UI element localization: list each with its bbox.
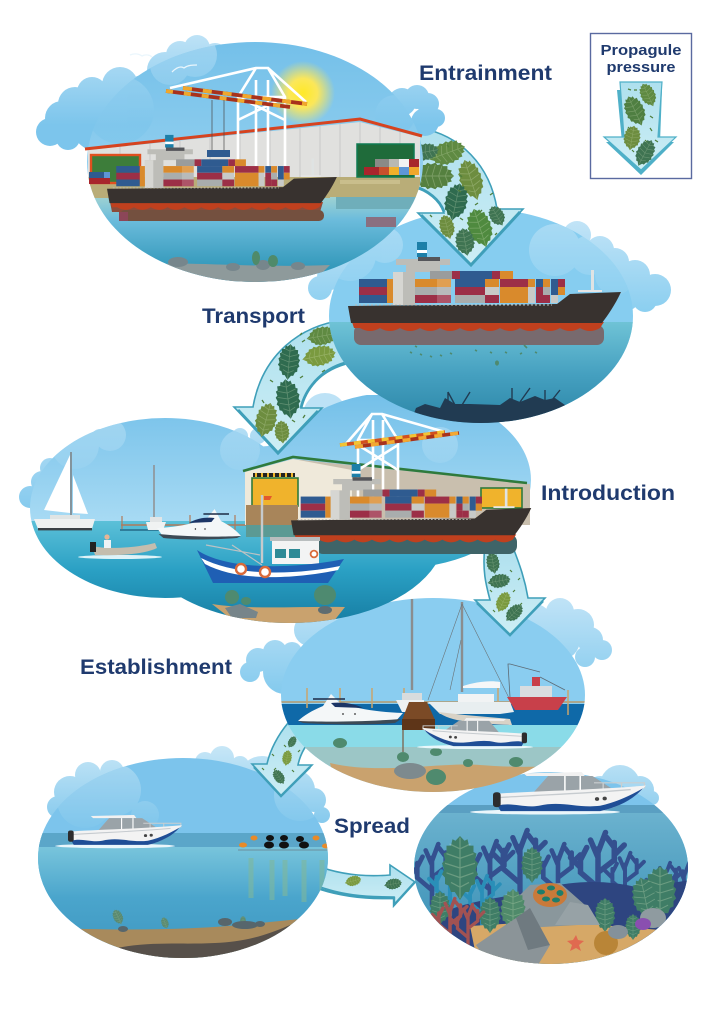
legend: propagule pressure bbox=[590, 34, 692, 178]
seagrass bbox=[225, 585, 336, 605]
legend arrow bbox=[604, 81, 676, 175]
clouds bbox=[240, 598, 612, 694]
arrow: establishment to spread bbox=[252, 723, 315, 796]
speedboat bbox=[417, 718, 533, 749]
scene: transport bbox=[308, 209, 671, 427]
container ship bbox=[348, 242, 621, 331]
clouds bbox=[36, 35, 445, 152]
legend: propagule pressure: Propagule bbox=[600, 43, 682, 59]
back rock bbox=[520, 883, 584, 928]
motor cruiser bbox=[157, 509, 241, 540]
arrow: introduction to establishment bbox=[475, 545, 545, 635]
crane bbox=[340, 414, 459, 497]
scene: entrainment bbox=[36, 33, 445, 287]
dark reef mass bbox=[425, 880, 690, 950]
yacht bbox=[428, 681, 514, 714]
red ship bbox=[507, 664, 567, 710]
quay bbox=[85, 177, 420, 198]
sailboat bbox=[34, 452, 95, 530]
seabed plants and rocks bbox=[112, 910, 246, 928]
jetty bbox=[120, 515, 246, 531]
reef contents bbox=[414, 805, 688, 964]
crane bbox=[166, 68, 307, 178]
speedboat bbox=[55, 815, 182, 848]
wooden jetty bbox=[402, 702, 435, 730]
seagrass bbox=[252, 251, 278, 267]
scene: spread, coral reef bbox=[414, 765, 688, 964]
label: Entrainment: Entrainment bbox=[419, 62, 552, 85]
re-drawn clouds over sky bbox=[58, 766, 314, 820]
longlines bbox=[251, 858, 322, 902]
rib dinghy with driver bbox=[78, 534, 162, 559]
dock rail bbox=[270, 701, 590, 703]
water and seabed bbox=[32, 521, 471, 623]
label: Transport: Transport bbox=[202, 305, 305, 328]
seagrass and rocks bbox=[333, 738, 523, 785]
sky bbox=[20, 395, 540, 525]
hull reflection bbox=[110, 202, 324, 221]
label: Establishment: Establishment bbox=[80, 656, 232, 679]
masts bbox=[412, 599, 462, 692]
starfish bbox=[567, 935, 584, 951]
scene: establishment bbox=[240, 598, 612, 800]
cloud behind reef bbox=[586, 765, 659, 805]
birds bbox=[130, 54, 197, 72]
reflection under ship bbox=[315, 534, 517, 554]
rib dinghy bbox=[438, 712, 512, 725]
purple coral and rock bbox=[635, 908, 666, 930]
speedboat bbox=[470, 772, 646, 814]
teal coral bbox=[429, 860, 500, 925]
water bbox=[410, 805, 695, 970]
scene: spread, open water with aquaculture bbox=[30, 746, 340, 965]
quay reflection bbox=[336, 197, 421, 209]
clouds bbox=[308, 221, 671, 312]
water bbox=[94, 197, 416, 282]
sand bbox=[470, 924, 656, 964]
branching corals bbox=[409, 830, 702, 912]
label: Introduction: Introduction bbox=[541, 482, 675, 505]
buoys bbox=[264, 835, 309, 848]
sky bbox=[329, 209, 633, 423]
white cruiser bbox=[298, 694, 403, 724]
sand bbox=[330, 763, 536, 792]
clouds bbox=[47, 746, 330, 826]
label: Spread: Spread bbox=[334, 815, 410, 838]
sky bbox=[414, 772, 688, 964]
arrow: to coral reef bbox=[315, 865, 415, 905]
small yacht behind bbox=[396, 700, 424, 712]
container ship bbox=[291, 464, 531, 542]
warehouse bbox=[243, 457, 530, 537]
sky bbox=[281, 598, 585, 792]
arrow: transport to introduction bbox=[234, 320, 350, 453]
sponge bbox=[594, 931, 618, 955]
seabed bbox=[166, 264, 330, 282]
red coral bbox=[432, 899, 484, 948]
water and seabed bbox=[38, 833, 328, 958]
rocks bbox=[168, 257, 305, 271]
legend: propagule pressure: pressure bbox=[606, 60, 676, 76]
scene: introduction bbox=[19, 393, 540, 631]
clouds bbox=[19, 393, 529, 511]
containers on quay bbox=[364, 159, 419, 175]
brain coral bbox=[533, 883, 567, 907]
moored yacht with mast bbox=[146, 465, 166, 530]
rigging bbox=[428, 604, 510, 700]
drifting propagules bbox=[410, 345, 537, 357]
sky bbox=[87, 42, 423, 282]
green fern mid bbox=[500, 889, 526, 924]
warehouse bbox=[85, 119, 422, 184]
sky bbox=[38, 758, 328, 958]
ferns bbox=[430, 836, 676, 940]
rock small bbox=[608, 925, 628, 939]
fishing boat bbox=[197, 495, 344, 583]
arrow: entrainment to transport bbox=[410, 128, 523, 265]
sun bbox=[271, 61, 335, 125]
container ship bbox=[107, 135, 337, 210]
hull reflection bbox=[354, 325, 604, 345]
foreground rock bbox=[476, 908, 550, 965]
water bands bbox=[270, 704, 600, 726]
water and reef bbox=[320, 322, 640, 427]
